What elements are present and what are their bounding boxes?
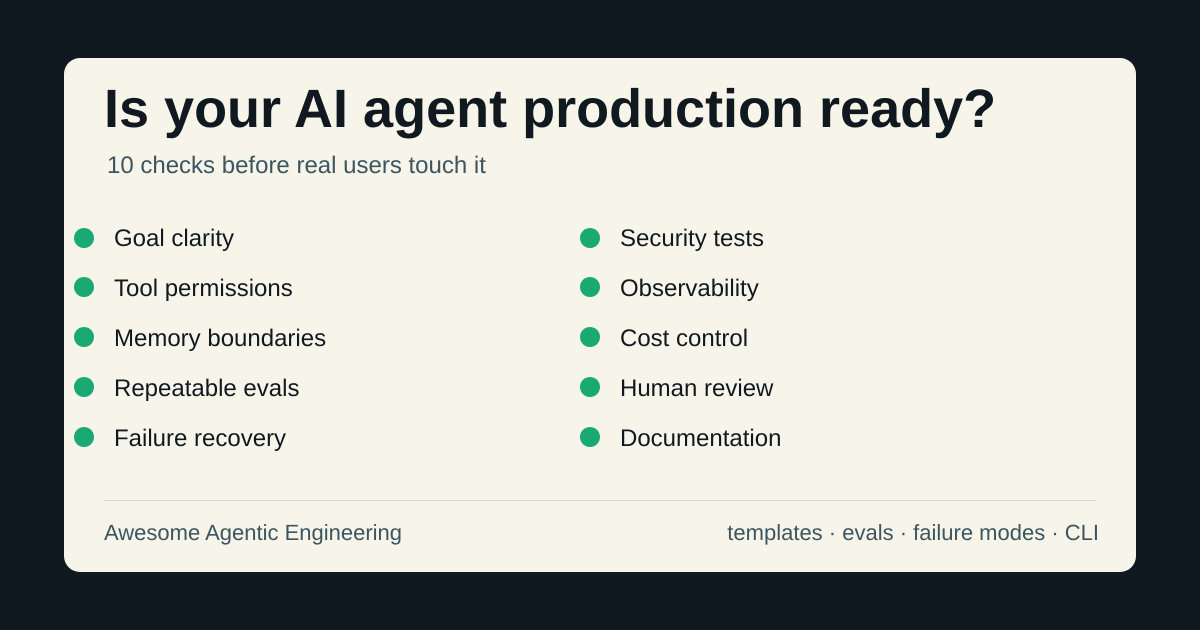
checklist right column (580, 225, 781, 452)
item: Failure recovery: Failure recovery (114, 425, 286, 452)
footer left: brand: Awesome Agentic Engineering (104, 520, 402, 545)
item: Human review: Human review (620, 375, 773, 402)
card panel (64, 58, 1136, 572)
footer right: topics: templates · evals · failure modes · CLI (727, 520, 1099, 545)
title: Is your AI agent production ready? (104, 79, 996, 139)
checklist left column (74, 225, 326, 452)
item: Security tests: Security tests (620, 225, 764, 252)
subtitle: 10 checks before real users touch it (107, 152, 486, 179)
item: Observability: Observability (620, 275, 759, 302)
item: Goal clarity: Goal clarity (114, 225, 234, 252)
item: Repeatable evals: Repeatable evals (114, 375, 299, 402)
item: Memory boundaries: Memory boundaries (114, 325, 326, 352)
item: Documentation: Documentation (620, 425, 781, 452)
item: Cost control: Cost control (620, 325, 748, 352)
item: Tool permissions: Tool permissions (114, 275, 293, 302)
